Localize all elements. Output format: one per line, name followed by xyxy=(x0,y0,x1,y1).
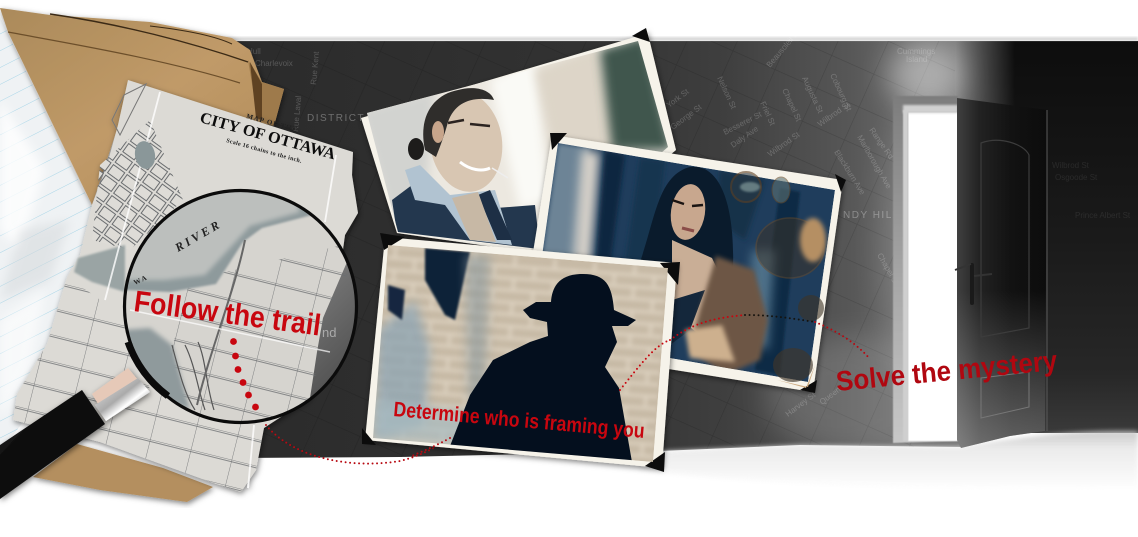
street labels: Osgoode St xyxy=(1055,173,1098,182)
label: Determine who is framing you: Determine who is framing you xyxy=(393,398,646,443)
street labels: Nelson St xyxy=(715,75,738,111)
hat silhouette figure xyxy=(450,274,640,470)
street labels: Prince Albert St xyxy=(1075,211,1131,220)
street labels: Besserer St xyxy=(722,109,764,137)
street labels: Wilbrod St xyxy=(816,100,852,129)
door frame xyxy=(893,96,958,443)
street labels: Queen xyxy=(818,385,842,407)
label: Solve the mystery: Solve the mystery xyxy=(835,345,1059,397)
street labels: Blackburn Ave xyxy=(832,148,867,197)
photo: woman in fur xyxy=(518,133,846,393)
map title: MAP OF THE xyxy=(245,112,298,134)
label: Follow the trail: Follow the trail xyxy=(132,285,323,342)
lens: W A xyxy=(132,274,148,287)
map title: Scale 16 chains to the inch. xyxy=(225,138,303,165)
door opening xyxy=(893,96,958,443)
crumpled lined paper xyxy=(0,17,92,452)
street labels: George St xyxy=(669,102,704,132)
lower door panel xyxy=(981,372,1029,418)
magnifying glass xyxy=(0,185,365,499)
floor fade xyxy=(640,431,1138,490)
street labels: Harvey St xyxy=(784,390,818,419)
street labels: Frank St xyxy=(690,325,720,351)
street labels: Chapel St xyxy=(875,252,901,287)
upper door panel xyxy=(981,140,1029,337)
street labels xyxy=(247,27,1131,419)
street labels: Charlevoix xyxy=(255,59,293,68)
door xyxy=(955,98,1047,448)
torn city map xyxy=(13,80,358,492)
street labels: York St xyxy=(665,87,691,110)
street labels: Daly Ave xyxy=(729,124,760,150)
lens xyxy=(127,192,355,421)
street labels: Chapel St xyxy=(780,87,804,123)
lens: nd xyxy=(322,325,336,340)
river xyxy=(127,206,310,293)
street labels: Wilbrod St xyxy=(766,130,802,159)
old tan folder bottom xyxy=(33,444,213,502)
street labels: Rue Kent xyxy=(309,50,321,85)
magnifier handle xyxy=(0,368,150,499)
street labels: Wilbrod St xyxy=(1052,161,1090,170)
street labels: Beausoleil Dr xyxy=(765,27,802,69)
street labels: Friel St xyxy=(758,100,777,128)
lens rim xyxy=(124,190,356,422)
street labels: Marlborough Ave xyxy=(855,134,894,191)
photo: smiling man xyxy=(360,28,680,260)
street labels: Rue Laval xyxy=(291,95,303,132)
coffee stains xyxy=(731,172,826,388)
street labels: Cummings xyxy=(897,47,935,56)
street labels: Augusta St xyxy=(800,75,825,115)
old tan folder top xyxy=(0,8,284,205)
panel: dark street map wall xyxy=(225,27,1138,458)
dotted trail across photos xyxy=(412,315,869,456)
door handle xyxy=(955,263,992,305)
river label: RIVER xyxy=(172,217,224,255)
street labels: DISTRICT xyxy=(307,113,365,124)
street labels: Range Rd xyxy=(867,126,895,161)
photo: silhouette in hat xyxy=(362,233,680,472)
dotted trail to photos xyxy=(266,425,450,464)
light xyxy=(908,112,958,441)
map title: CITY OF OTTAWA xyxy=(198,109,338,163)
red trail dots on map xyxy=(230,338,259,410)
street labels: Island xyxy=(906,55,927,64)
street labels: Hull xyxy=(247,47,261,56)
street labels: Cobourg St xyxy=(828,72,854,113)
street labels: NDY HILL xyxy=(843,210,900,221)
